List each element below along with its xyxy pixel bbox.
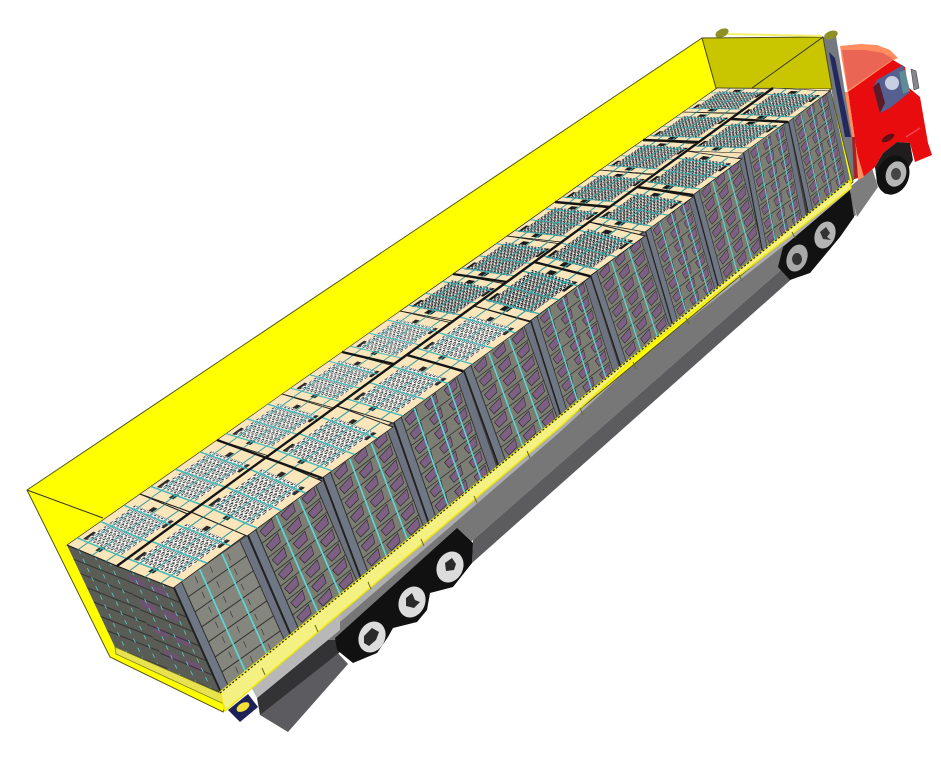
wheel box: tractor axles	[778, 190, 854, 280]
rear stack left	[67, 545, 168, 668]
deck lower band	[472, 262, 795, 563]
cab highlight	[906, 128, 920, 137]
dark gaps between pallet pairs	[117, 88, 788, 566]
rear wheel 3	[431, 547, 469, 587]
mirror	[911, 69, 919, 90]
cargo rear face	[67, 545, 224, 704]
wheel arch	[875, 142, 913, 194]
cab roof panel	[842, 50, 893, 90]
rear floor tie strip	[115, 647, 224, 704]
stack 6	[530, 276, 620, 416]
rear wheel 2	[393, 582, 431, 622]
post cap right	[823, 29, 839, 41]
cab door body	[848, 60, 932, 177]
lashing strip along bed	[220, 180, 851, 711]
rear light strip	[250, 612, 340, 698]
cargo base shadow	[67, 89, 850, 693]
cargo side: pallet stacks	[173, 89, 850, 693]
drive wheel 2	[810, 218, 840, 252]
cab wheel	[871, 151, 915, 199]
stack 10	[743, 122, 807, 252]
trailer curtain wall: yellow	[27, 26, 853, 712]
deck upper band	[300, 180, 856, 640]
rear end block	[260, 650, 348, 732]
side wall and floor	[27, 38, 853, 712]
rear wheel 1	[353, 617, 391, 657]
inner row of pallets	[67, 88, 773, 566]
top rail	[725, 34, 822, 36]
cab roof peach edge	[840, 44, 898, 94]
front wall	[702, 37, 832, 89]
cab dark red lower panel	[845, 137, 858, 180]
door handle	[880, 132, 896, 144]
stack 7	[590, 232, 675, 367]
windshield	[873, 65, 910, 113]
stack 2	[247, 478, 365, 636]
post cap left	[714, 26, 730, 40]
cab	[840, 44, 932, 199]
cargo top: pallet decks	[67, 88, 830, 588]
cab side strip	[843, 92, 864, 180]
stack 5	[463, 321, 565, 467]
stack 3	[322, 423, 431, 579]
rear stack right	[120, 566, 221, 692]
front wall crease	[752, 37, 823, 88]
rear light	[228, 694, 258, 722]
stack 9	[693, 153, 768, 288]
stack 1	[173, 536, 294, 693]
rear corner crease	[27, 490, 103, 518]
cab chassis step	[850, 168, 878, 217]
truck underbody deck	[250, 180, 856, 732]
cargo top base	[67, 88, 830, 588]
rear dark band	[257, 630, 340, 715]
drive wheel 1	[782, 241, 812, 275]
headboard post	[823, 36, 854, 180]
wheel box: rear axles	[335, 528, 473, 663]
stack 11	[788, 89, 850, 214]
stack 4	[393, 371, 498, 524]
outer row of pallets	[117, 88, 830, 588]
thin light strip	[340, 188, 851, 622]
stack 8	[645, 195, 720, 325]
